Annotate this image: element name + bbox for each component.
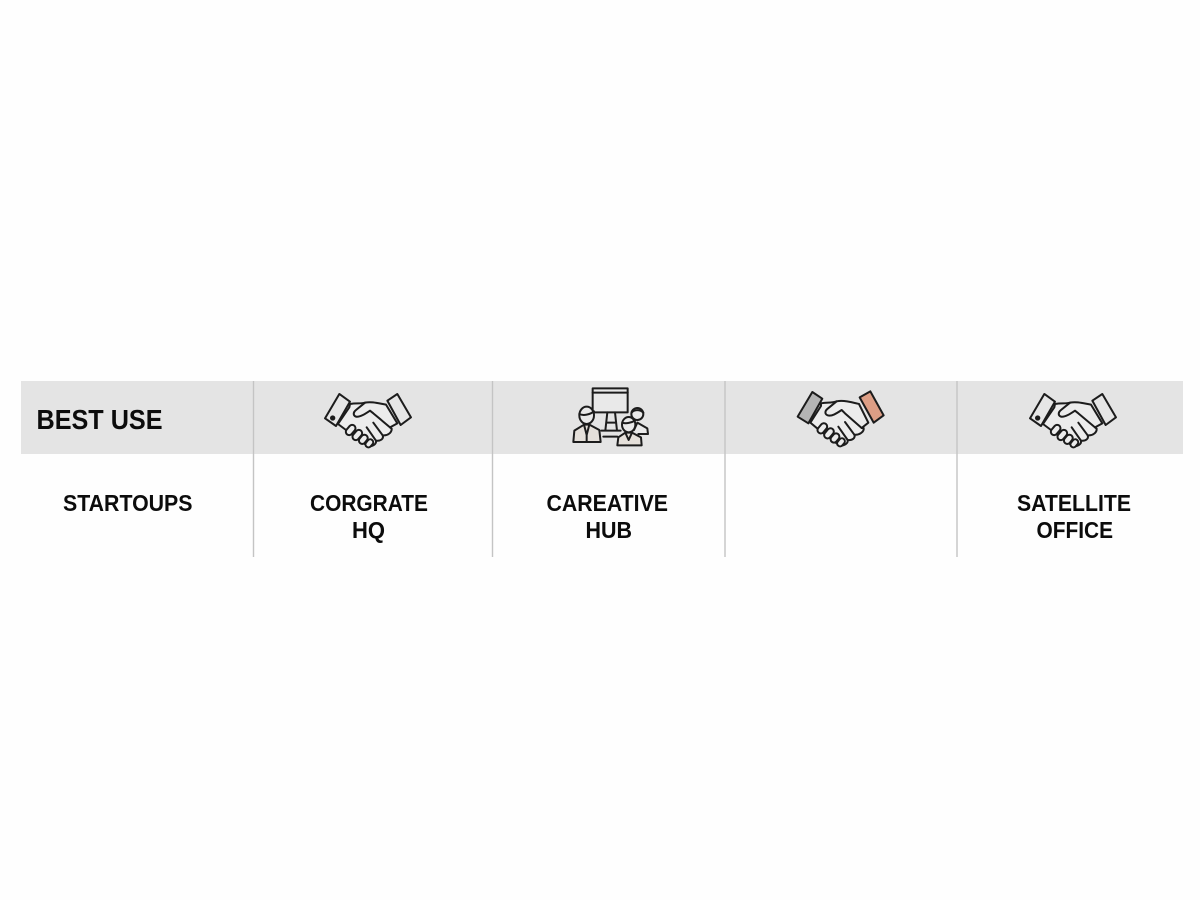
- label: corgrate hq: [310, 490, 428, 543]
- label: startoups: STARTOUPS: [63, 490, 192, 516]
- icon: handshake, corporate hq: [325, 394, 411, 449]
- heading: best use: BEST USE: [36, 404, 162, 435]
- icon: handshake with coloured cuffs: [798, 391, 884, 448]
- label: satellite office: SATELLITE: [1017, 490, 1131, 516]
- label: careative hub: CAREATIVE: [546, 490, 668, 516]
- label: corgrate hq: HQ: [352, 517, 385, 543]
- icon: handshake, satellite office: [1030, 394, 1116, 449]
- label: careative hub: HUB: [586, 517, 632, 543]
- label: satellite office: [1017, 490, 1131, 543]
- label: careative hub: [546, 490, 668, 543]
- icon: presentation team, creative hub: [573, 388, 648, 445]
- header band: [21, 381, 1183, 454]
- label: corgrate hq: CORGRATE: [310, 490, 428, 516]
- label: satellite office: OFFICE: [1036, 517, 1113, 543]
